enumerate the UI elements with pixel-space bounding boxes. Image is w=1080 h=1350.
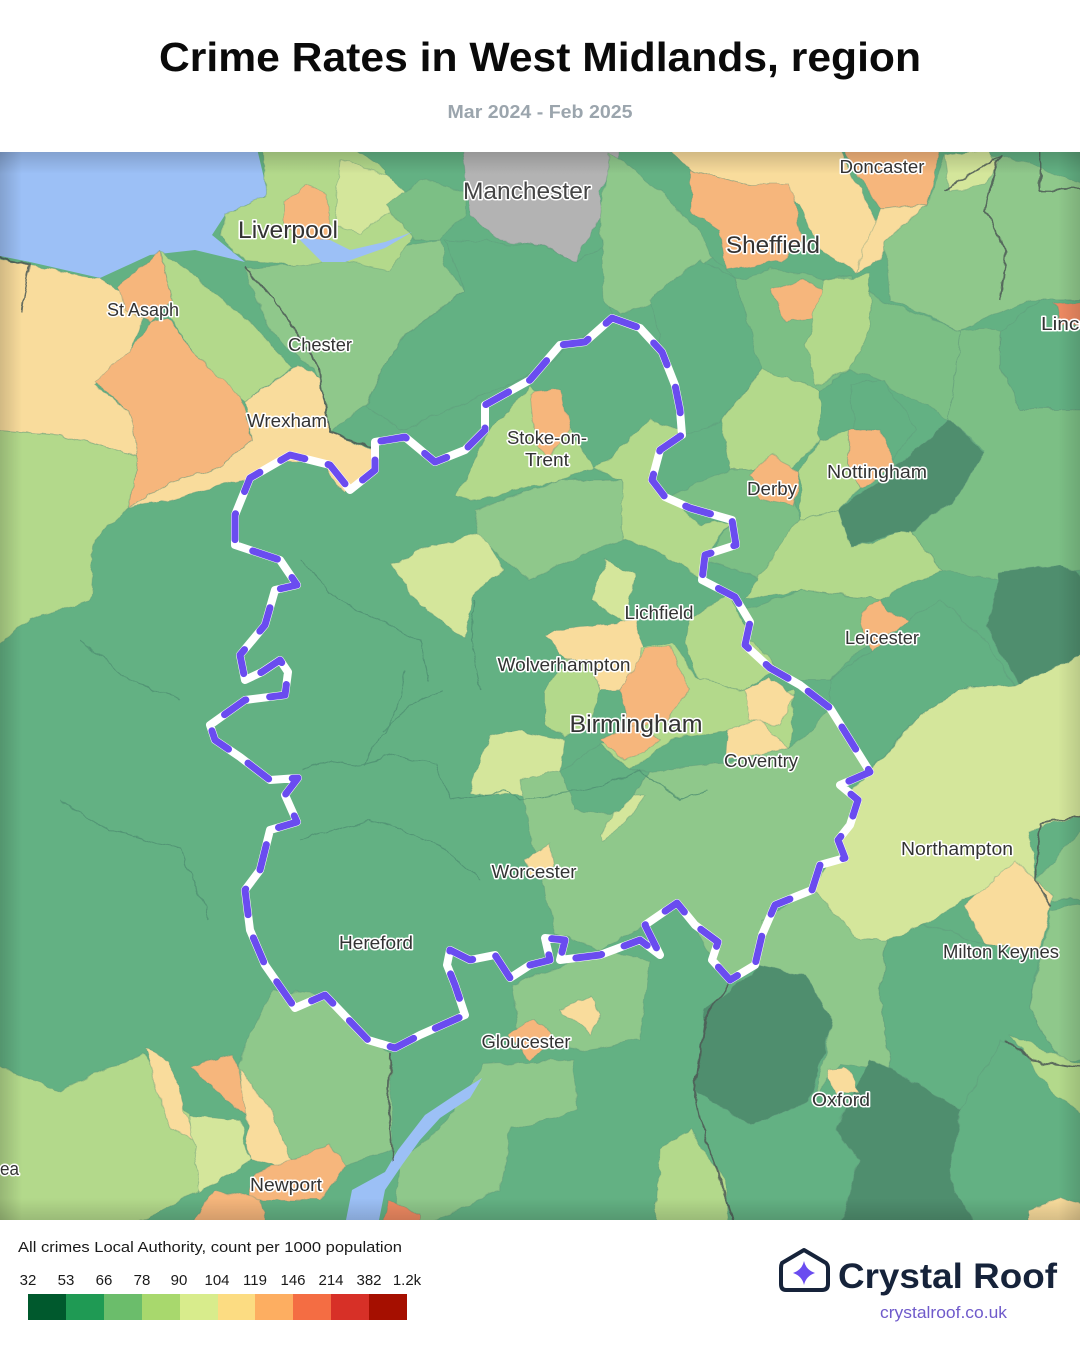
label: Worcester: Worcester	[492, 862, 577, 882]
legend values: 53	[58, 1272, 74, 1289]
title: Crime Rates in West Midlands, region	[159, 34, 921, 80]
region group: East Midlands	[650, 260, 1080, 1110]
legend values: 146	[280, 1272, 306, 1289]
boundary: north Wales coast inland	[0, 255, 30, 310]
region group: Staffordshire and central West Midlands	[392, 385, 795, 795]
region group: Yorkshire and north-east	[600, 130, 1080, 580]
boundary: south of West Midlands	[695, 980, 740, 1240]
legend colour scale	[28, 1294, 407, 1320]
label: Oxford: Oxford	[812, 1090, 870, 1110]
region group: south	[0, 890, 1080, 1240]
boundary: east	[945, 155, 1005, 300]
sea: Irish Sea	[0, 140, 268, 278]
legend values: 214	[318, 1272, 344, 1289]
logo: Crystal Roof	[781, 1250, 1057, 1322]
legend values: 104	[204, 1272, 230, 1289]
label: Derby: Derby	[747, 479, 797, 499]
icon: house with star	[781, 1250, 828, 1290]
map base: medium green local authorities	[0, 152, 1080, 1220]
legend values: 1.2k	[393, 1272, 422, 1289]
label: Stoke-on-Trent: Trent	[525, 450, 569, 470]
label: Milton Keynes: Milton Keynes	[943, 942, 1059, 962]
legend title: All crimes Local Authority, count per 1000 population	[18, 1239, 402, 1256]
label: Liverpool: Liverpool	[238, 217, 338, 244]
map edge shadows	[0, 152, 1080, 1220]
label: Manchester: Manchester	[463, 178, 591, 205]
website url: crystalroof.co.uk	[880, 1304, 1008, 1322]
region group: north-west	[0, 130, 632, 660]
subtitle: date range: Mar 2024 - Feb 2025	[448, 101, 632, 122]
label: Wolverhampton: Wolverhampton	[498, 655, 630, 675]
water: Mersey and Dee estuaries	[298, 232, 412, 262]
label: Nottingham: Nottingham	[827, 462, 927, 482]
rivers and minor boundaries	[60, 560, 705, 920]
region group: Worcestershire and Warwickshire	[520, 708, 870, 980]
legend values: 66	[96, 1272, 112, 1289]
label: Northampton: Northampton	[901, 839, 1013, 859]
label: Doncaster: Doncaster	[840, 157, 924, 177]
legend	[18, 1239, 422, 1320]
legend values: 78	[134, 1272, 150, 1289]
wordmark: Crystal Roof	[838, 1257, 1057, 1296]
West Midlands boundary, purple dashes	[210, 318, 870, 1048]
boundary: Northamptonshire	[1035, 812, 1080, 905]
water: Severn estuary	[345, 1078, 482, 1225]
label: Stoke-on-Trent: Stoke-on-	[507, 428, 587, 448]
label: Gloucester: Gloucester	[482, 1032, 570, 1052]
label: Swansea, clipped: ea	[0, 1159, 20, 1179]
boundary: England and Wales border, south	[388, 1052, 392, 1160]
legend values: 119	[243, 1272, 267, 1289]
West Midlands boundary, white casing	[210, 318, 870, 1048]
place name labels	[0, 157, 1080, 1195]
label: Hereford: Hereford	[339, 933, 413, 953]
label: Sheffield: Sheffield	[726, 232, 820, 259]
label: Stoke-on-Trent	[507, 428, 587, 470]
label: Coventry: Coventry	[724, 751, 798, 771]
label: Leicester: Leicester	[845, 628, 919, 648]
label: Birmingham: Birmingham	[570, 711, 702, 738]
boundary: Nottinghamshire	[1040, 140, 1080, 190]
legend values: 32	[20, 1272, 36, 1289]
boundary: Berkshire	[1005, 1040, 1080, 1070]
boundary: England and Wales border, north	[245, 268, 372, 448]
label: Chester: Chester	[288, 335, 352, 355]
legend values: 382	[356, 1272, 382, 1289]
label: Newport: Newport	[250, 1175, 322, 1195]
label: Lichfield: Lichfield	[624, 603, 694, 623]
legend values: 90	[171, 1272, 187, 1289]
label: Wrexham: Wrexham	[247, 411, 327, 431]
legend values	[20, 1272, 422, 1289]
label: St Asaph: St Asaph	[107, 300, 179, 320]
